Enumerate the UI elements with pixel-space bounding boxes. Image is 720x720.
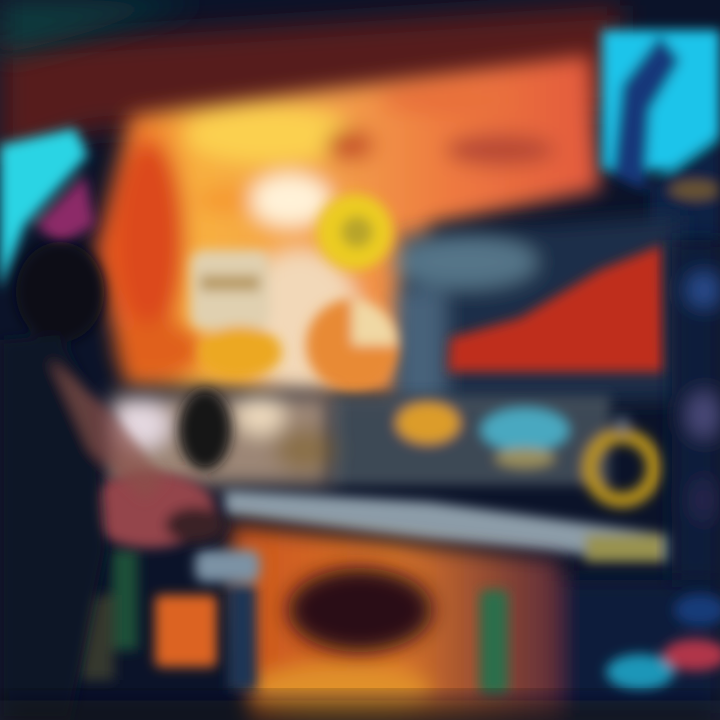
adult silhouette — [0, 242, 165, 720]
icon: pie chart orange — [306, 299, 398, 391]
child silhouette — [85, 390, 231, 548]
icon: yellow coin — [317, 194, 393, 270]
right side dark column — [672, 240, 720, 580]
icon: beige card and yellow wedge — [190, 250, 282, 378]
icon: blue and red ovals — [606, 594, 720, 690]
panel: orange floor — [230, 525, 720, 720]
panel: dark chart board — [393, 215, 680, 405]
panel: top right cyan window — [602, 30, 720, 240]
panel: orange flame wall — [95, 55, 600, 395]
dark mound — [288, 568, 432, 652]
panel: light horizontal bar — [225, 490, 670, 562]
panel: left cyan shape — [0, 128, 95, 290]
bottom vignette — [0, 700, 720, 720]
row of chart icons — [330, 395, 654, 500]
chart: red area chart — [448, 245, 664, 372]
blue figure column — [78, 550, 260, 690]
green bottle — [480, 590, 508, 695]
panel: pale middle area — [110, 395, 335, 485]
orange square — [155, 595, 217, 667]
